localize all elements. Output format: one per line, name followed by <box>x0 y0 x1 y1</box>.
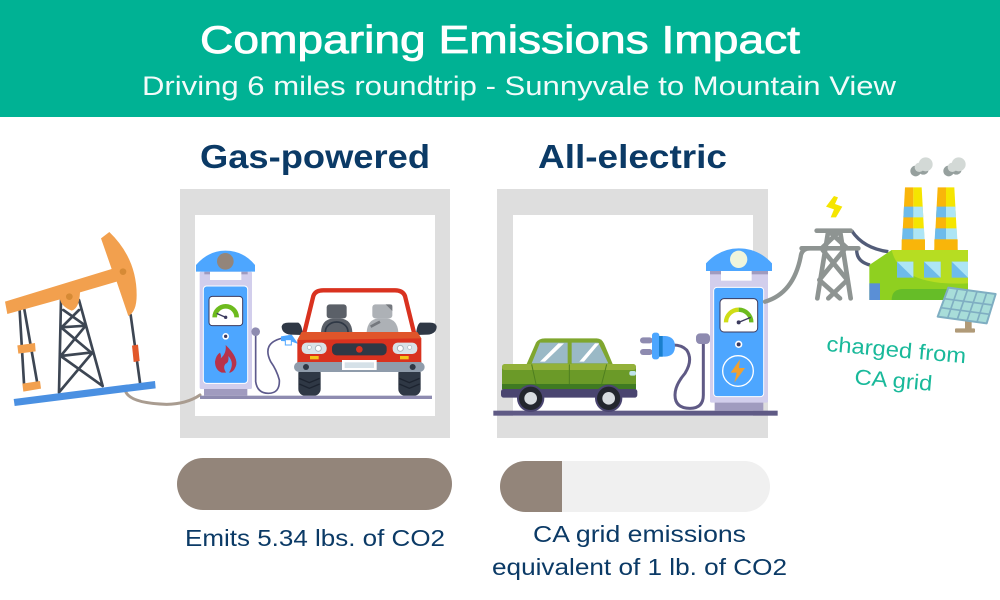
heading: all-electric: All-electric <box>538 138 727 175</box>
gas pump <box>196 251 255 396</box>
red car <box>282 290 437 396</box>
caption: charged from CA grid: charged from <box>826 332 967 368</box>
electric car and charger scene <box>493 248 778 416</box>
panel frame: all-electric <box>497 189 768 438</box>
bar: gas-powered emissions <box>177 458 452 510</box>
caption: all-electric emissions: CA grid emissions <box>533 521 746 547</box>
caption: all-electric emissions: equivalent of 1 lb. of CO2 <box>492 554 787 580</box>
electric charger <box>706 248 772 411</box>
bar: all-electric emissions <box>500 461 770 512</box>
power grid: tower, factory and solar panel <box>765 157 996 333</box>
icon: smoke clouds <box>910 157 966 176</box>
charging cable and plug <box>640 333 710 408</box>
subtitle: Driving 6 miles roundtrip - Sunnyvale to Mountain View <box>142 71 897 101</box>
caption: charged from CA grid <box>826 332 967 396</box>
icon: solar panel <box>938 288 996 333</box>
title: Comparing Emissions Impact <box>200 19 800 62</box>
grid cable <box>765 248 810 302</box>
panel frame: gas-powered <box>180 189 450 438</box>
caption: all-electric emissions <box>492 521 787 580</box>
green electric car <box>501 338 637 412</box>
caption: gas-powered emissions: Emits 5.34 lbs. of CO2 <box>185 525 445 551</box>
icon: factory <box>869 187 968 300</box>
icon: oil pumpjack <box>5 232 200 406</box>
ground line <box>200 396 432 399</box>
heading: gas-powered: Gas-powered <box>200 138 430 175</box>
dark cables <box>852 231 888 265</box>
fuel hose and nozzle <box>251 327 298 393</box>
gas pump and red car scene <box>196 251 437 399</box>
header banner <box>0 0 1000 117</box>
icon: transmission tower <box>802 231 858 298</box>
caption: charged from CA grid: CA grid <box>854 365 933 396</box>
icon: lightning bolt <box>826 196 842 217</box>
ground line <box>493 411 778 416</box>
